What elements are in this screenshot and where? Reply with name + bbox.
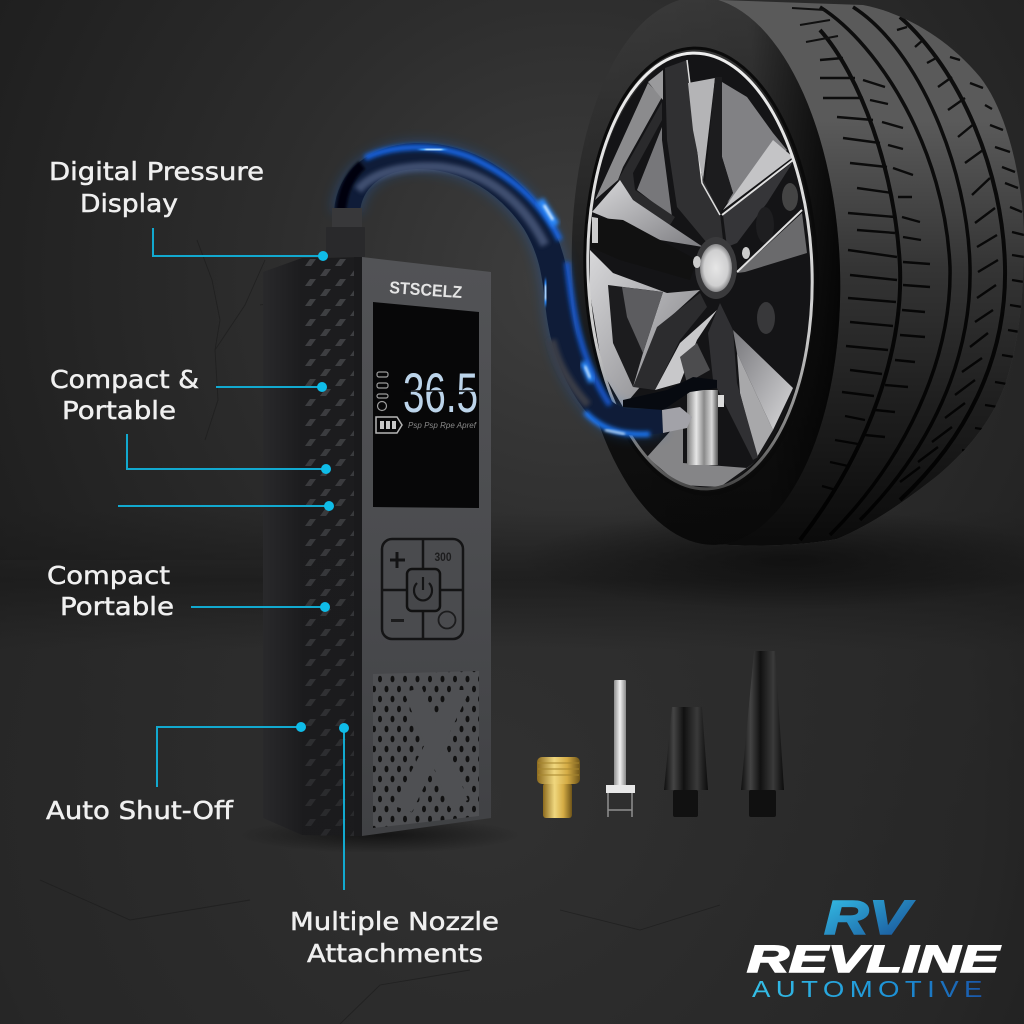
power icon	[414, 577, 432, 600]
carbon side panel	[302, 257, 362, 836]
callout: auto shut-off: Auto Shut-Off	[46, 796, 234, 825]
valve stem	[687, 390, 724, 465]
wheel rim	[587, 52, 813, 490]
tire and wheel	[572, 0, 1024, 582]
hose connector	[326, 208, 365, 257]
logo tagline: AUTOMOTIVE	[752, 977, 982, 1002]
air hose	[326, 147, 717, 434]
short cone nozzle	[664, 707, 708, 817]
tall cone nozzle	[741, 651, 784, 817]
display screen: 36.5	[403, 361, 478, 424]
hub cap	[693, 237, 750, 299]
spokes	[590, 60, 807, 487]
unit labels: Psp Psp Rpe Apref	[408, 421, 477, 430]
callout: multiple nozzle attachments: Attachments	[307, 939, 483, 968]
callout: digital pressure display: Display	[80, 189, 178, 218]
logo wordmark: REVLINE	[747, 939, 1002, 981]
brand: STSCELZ	[389, 278, 463, 302]
three hundred button: 300	[434, 550, 452, 564]
pump back side	[263, 258, 302, 835]
callout: compact and portable: Compact &	[50, 365, 199, 394]
leader line without label	[118, 501, 334, 511]
callout: compact portable	[47, 561, 330, 621]
logo monogram: RV	[824, 892, 915, 945]
circle button	[438, 612, 456, 628]
hose end	[623, 377, 717, 410]
control buttons	[382, 539, 463, 640]
air pump device	[263, 257, 491, 848]
brass adapter	[537, 757, 580, 818]
callout: compact and portable: Portable	[62, 396, 176, 425]
minus	[391, 619, 404, 622]
leader line	[127, 434, 331, 474]
tire sidewall	[563, 0, 849, 550]
battery icon	[376, 417, 402, 433]
callout: compact and portable	[50, 365, 327, 425]
display screen	[373, 302, 479, 508]
speaker grille	[373, 670, 479, 830]
accessories	[537, 651, 784, 818]
glow highlights	[420, 149, 625, 434]
mode icons	[377, 372, 388, 410]
callout: digital pressure display: Digital Pressure	[49, 157, 264, 186]
tire tread	[718, 0, 1024, 546]
callout: digital pressure display	[49, 157, 328, 261]
pump front face	[362, 257, 491, 836]
logo: Revline Automotive	[747, 892, 1002, 1002]
callout: multiple nozzle attachments: Multiple Nozzle	[290, 907, 499, 936]
callout: compact portable: Compact	[47, 561, 170, 590]
callout: multiple nozzle attachments	[290, 723, 499, 968]
callout: auto shut-off	[46, 722, 306, 825]
plus	[390, 552, 405, 568]
callout: compact portable: Portable	[60, 592, 174, 621]
needle pin	[606, 680, 635, 817]
